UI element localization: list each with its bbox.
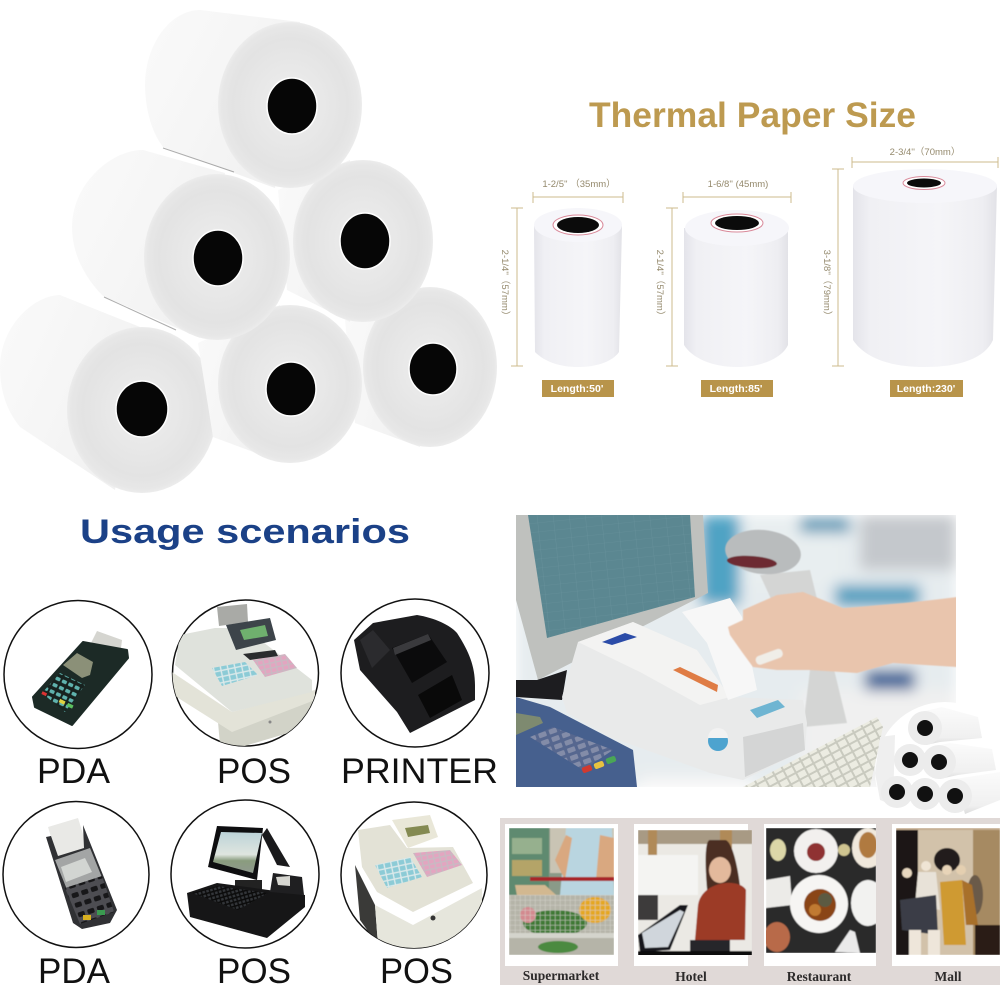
device labels, first row: PDA [37,751,110,791]
paper slip [682,598,757,700]
white receipt printer [562,622,807,780]
device: handheld card terminal [3,802,149,948]
middle right roll [278,160,433,322]
height dimension: 2-1/4''（57mm） [499,250,511,320]
roll pyramid photo [0,10,497,493]
width dimension: 1-6/8'' (45mm) [708,179,768,190]
width dimension [852,146,998,168]
middle left inset roll [894,744,926,776]
keyboard [743,717,883,787]
paper roll [684,210,789,367]
height dimension [654,208,678,366]
venue card: Supermarket [505,824,618,983]
hand holding the paper [728,592,957,673]
device labels, first row: PRINTER [341,751,498,791]
heading: Usage scenarios: Usage scenarios [80,513,410,551]
device: touchscreen POS terminal [171,800,319,948]
device labels, second row: PDA [38,951,110,991]
computer monitor [516,515,708,700]
paper roll [534,208,622,367]
size diagram: 45mm roll [654,179,791,397]
venue card: Hotel: Hotel [675,969,707,984]
length badge: Length:50' [551,383,603,395]
top roll [145,10,362,188]
heading: Thermal Paper Size: Thermal Paper Size [589,96,916,135]
width dimension: 1-2/5'' （35mm） [542,178,616,190]
length badge [542,380,614,397]
device: cash register POS [172,600,318,748]
venue card: Mall [892,824,1000,984]
width dimension [533,178,623,203]
height dimension [499,208,523,366]
middle right inset roll [922,743,996,779]
length badge: Length:230' [897,383,955,395]
height dimension [821,169,844,366]
device labels, first row: POS [217,751,291,791]
venue card: Restaurant [764,824,885,984]
device labels, second row [38,951,453,991]
bottom right roll [345,287,497,447]
device labels, second row: POS [380,951,453,991]
bottom left roll [0,295,217,493]
bottom centre roll [198,305,362,463]
device: PDA with printer [4,600,152,748]
barcode scanner [723,526,847,727]
size diagram: 35mm roll [499,178,623,397]
length badge [701,380,773,397]
device labels, second row: POS [217,951,291,991]
photo: receipt printer at a checkout [516,515,957,787]
length badge: Length:85' [710,383,762,395]
width dimension: 2-3/4''（70mm） [890,146,960,158]
bottom inset rolls [881,772,1000,814]
panel: venue strip [500,818,1000,985]
top inset roll [908,707,982,745]
device: beige cash register [341,802,487,960]
inset: small stack of rolls [875,702,1000,842]
width dimension [683,179,791,203]
venue card: Restaurant: Restaurant [787,969,852,984]
height dimension: 3-1/8''（79mm） [821,250,833,320]
blurred shop background [516,515,956,787]
size diagram: 70mm roll [821,146,998,397]
height dimension: 2-1/4''（57mm） [654,250,666,320]
middle left roll [72,150,290,340]
length badge [890,380,963,397]
venue card: Mall: Mall [934,969,962,984]
paper roll [853,169,997,367]
device labels, first row [37,751,498,791]
venue card: Hotel [634,824,752,984]
device: black thermal printer [341,599,489,747]
card payment terminal [516,697,637,787]
venue card: Supermarket: Supermarket [523,968,600,983]
